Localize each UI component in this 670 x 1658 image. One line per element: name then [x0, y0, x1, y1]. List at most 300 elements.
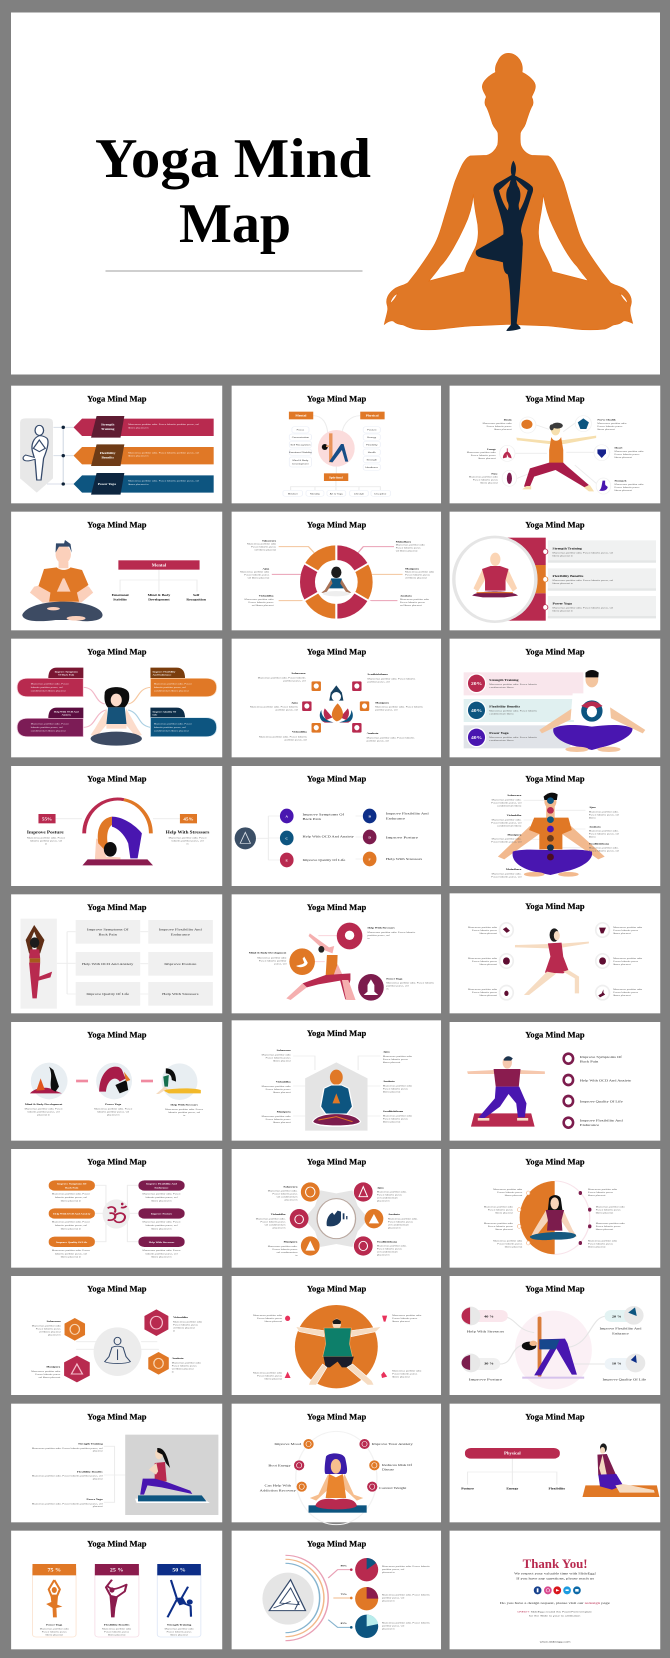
labels — [32, 1442, 104, 1508]
panel: slide 4 seated man and mental tree — [11, 512, 222, 630]
panel: slide 12 man with seven chakras — [450, 766, 660, 886]
labels right: Nerve Health — [597, 418, 616, 422]
pill: improve symptoms — [49, 1180, 95, 1202]
labels: Maecenas porttitor odio. Fusce lobortis — [386, 982, 435, 985]
labels left: Fusce lobortis purus — [266, 1057, 291, 1059]
labels: Anahata — [172, 1356, 184, 1360]
labels left: libero placerat — [478, 457, 496, 460]
boxes: Improve Posture — [164, 962, 197, 966]
center figure — [94, 1327, 141, 1376]
label: help with stressors: Help With Stressors — [166, 830, 210, 834]
text right: libero placerat — [392, 1320, 410, 1323]
labels right: Maecenas porttitor odio. — [377, 1245, 407, 1248]
labels left: Maecenas porttitor odio. — [256, 1218, 286, 1220]
labels: Maecenas porttitor odio. Fusce lobortis porttitor purus, vel — [32, 1475, 103, 1478]
circle D: D — [368, 836, 372, 839]
labels right: libero placerat — [383, 1121, 401, 1123]
labels: lobortis porttitor purus, vel — [168, 1111, 201, 1114]
pill: help with stressors: Maecenas porttitor odio. Fusce — [143, 1249, 181, 1252]
design request note: Do you have a design request, please visit our redesign page — [500, 1601, 610, 1606]
labels: placerat — [93, 1450, 103, 1453]
labels left — [491, 793, 522, 878]
text left: libero placerat — [265, 1378, 282, 1380]
text right: libero placerat — [588, 1246, 606, 1249]
labels — [25, 1102, 204, 1117]
gauge 40: Help With Stressors — [467, 1330, 505, 1333]
tree: mental: Mind & Body — [148, 593, 171, 597]
house frame — [305, 1062, 368, 1131]
labels right: Fusce lobortis purus — [388, 1221, 414, 1223]
callout: improve flexibility: And Endurance — [153, 674, 172, 677]
panel: slide 3 warrior pose organ benefits — [450, 386, 660, 503]
pill: improve quality — [49, 1237, 95, 1259]
labels left: Fusce lobortis purus — [261, 1221, 286, 1223]
dash connector 2 — [141, 1080, 153, 1082]
rows — [548, 540, 656, 618]
boxes: Endurance — [171, 932, 190, 936]
labels: Fusce lobortis purus — [173, 1324, 199, 1326]
labels: Fusce lobortis purus — [36, 1328, 62, 1330]
pill: improve posture — [138, 1208, 185, 1230]
rows: Maecenas porttitor odio. Fusce lobortis purus, vel — [553, 579, 614, 582]
thank you message: We respect your valuable time with SlideEgg! — [514, 1571, 596, 1576]
pie 2: orange — [341, 1587, 378, 1610]
labels left: Sahasrara — [292, 671, 306, 675]
om icon — [103, 1199, 130, 1229]
text left: Fusce lobortis purus — [472, 929, 498, 932]
pie text: Maecenas porttitor odio. Fusce lobortis — [382, 1622, 431, 1624]
chakra icons — [302, 681, 369, 733]
gauge 20 — [600, 1306, 644, 1335]
panel: slide 6 ring with seated figure and three rows — [450, 512, 660, 630]
card: 75 percent: libero placerat — [46, 1634, 63, 1636]
title: Yoga Mind Map — [307, 1412, 366, 1422]
ribbon: flexibility benefits: libero placerat in — [128, 455, 149, 458]
circle E — [280, 853, 294, 867]
title: Yoga Mind Map — [525, 1285, 585, 1294]
labels: Maecenas porttitor odio. Fusce — [165, 1108, 204, 1111]
text left: Maecenas porttitor odio — [253, 1372, 283, 1374]
card: 50 percent: Maecenas porttitor odio — [165, 1628, 194, 1630]
tree: mental: Recognition — [186, 598, 206, 602]
labels right: Maecenas porttitor odio. — [589, 847, 619, 850]
labels: Power Yoga — [386, 977, 403, 980]
text left: Fusce lobortis purus — [472, 991, 498, 994]
text left: Maecenas porttitor odio — [493, 1188, 523, 1191]
labels — [31, 1315, 203, 1379]
gauge 20: 20 % — [612, 1315, 622, 1318]
labels right — [383, 1050, 413, 1123]
connectors — [83, 687, 106, 727]
slides row 1 and 2 — [11, 386, 660, 630]
text left: libero placerat — [495, 1212, 513, 1214]
labels right: Fusce lobortis purus — [377, 1194, 403, 1197]
card: 50 percent: Fusce lobortis purus — [167, 1631, 192, 1633]
labels: porttitor purus, vel — [386, 985, 409, 988]
percent: 45 — [180, 814, 197, 823]
connectors — [57, 932, 148, 994]
labels left: Fusce lobortis purus, vel — [491, 802, 522, 805]
title: Yoga Mind Map — [307, 1539, 366, 1549]
text right: libero placerat — [588, 1194, 606, 1197]
labels: Flexibility Benefits — [77, 1470, 104, 1473]
text right: Maecenas porttitor odio — [596, 1222, 625, 1225]
illustration: seated orange silhouette with navy tree pose figure — [384, 53, 633, 331]
panel: slide 19 om symbol with pills — [11, 1149, 222, 1268]
labels left: Maecenas porttitor odio — [469, 476, 499, 479]
pill: help with ocd: Maecenas porttitor odio. Fusce — [52, 1221, 91, 1224]
pill: improve symptoms: lobortis porttitor purus, vel — [55, 1196, 87, 1199]
connector dots — [543, 549, 548, 610]
labels right: Fusce lobortis purus — [396, 547, 422, 550]
labels: Sahasrara — [47, 1319, 61, 1323]
labels right: placerat in — [377, 1254, 390, 1257]
rows: libero placerat in — [553, 555, 574, 557]
percent: 45: 45% — [183, 817, 194, 821]
labels left: Fusce lobortis purus — [266, 1088, 291, 1091]
labels right: vel libero placerat — [405, 577, 427, 580]
callout: improve quality of life: Life — [153, 714, 158, 717]
box: physical: Physical — [366, 414, 379, 418]
labels right: Fusce lobortis purus — [400, 601, 426, 604]
connectors — [500, 1316, 607, 1364]
title: Yoga Mind Map — [525, 902, 585, 912]
labels right: Fusce lobortis purus — [383, 1118, 409, 1120]
labels: Maecenas porttitor odio. Fusce — [25, 1108, 63, 1110]
labels left: Fusce lobortis purus — [487, 425, 512, 428]
text right — [613, 926, 643, 997]
labels left: Maecenas porttitor odio — [262, 1054, 291, 1056]
label: help with stressors: lobortis porttitor purus, vel — [172, 840, 204, 842]
text left: Maecenas porttitor odio — [253, 1314, 283, 1317]
tree: mental: Stability — [113, 598, 127, 602]
callout: improve quality of life: condimentum libero placerat — [154, 730, 189, 732]
callout: improve symptoms: lobortis porttitor purus, vel — [31, 686, 63, 689]
labels left: porttitor purus, vel — [285, 739, 307, 741]
list: mental items: Development — [292, 463, 309, 465]
heading: Yoga Mind Map: Map — [179, 193, 291, 255]
panel: slide 25 lunge on gray square — [11, 1404, 222, 1522]
labels: in — [368, 937, 370, 940]
labels left: Fusce lobortis purus — [266, 1118, 291, 1121]
card: 50 percent: Strength Training — [167, 1623, 192, 1626]
pill: improve quality: Maecenas porttitor odio. Fusce — [52, 1249, 91, 1252]
labels left: Maecenas porttitor odio — [247, 543, 277, 546]
labels left: Nose — [491, 472, 499, 475]
labels left: Maecenas porttitor odio. — [492, 838, 522, 841]
ribbon: flexibility benefits — [74, 444, 214, 466]
text right — [392, 1314, 422, 1379]
tree: mental: Mental — [152, 563, 167, 567]
pose 1 — [30, 1063, 68, 1099]
figure: seated woman — [321, 567, 351, 596]
figure: wheel pose — [82, 817, 153, 865]
panel: slide 2 mental physical spiritual map — [232, 386, 441, 503]
pie 1: crimson: 90% — [341, 1564, 347, 1568]
figure: seated woman on mat — [309, 1453, 367, 1513]
labels: Help With Stressors — [171, 1103, 199, 1106]
connectors — [524, 800, 585, 848]
text right: Maecenas porttitor odio — [392, 1370, 422, 1373]
labels left: Fusce lobortis purus — [473, 479, 499, 482]
labels left: Vishuddha — [271, 1212, 286, 1216]
gauge 10: Improve Quality Of Life — [603, 1378, 647, 1381]
title: Yoga Mind Map — [87, 1539, 147, 1549]
title: Yoga Mind Map — [307, 394, 366, 404]
benefit labels: Control Weight — [379, 1486, 406, 1490]
labels left: Maecenas porttitor odio — [467, 451, 496, 454]
labels left: vel libero placerat — [248, 577, 270, 580]
labels: Power Yoga — [87, 1497, 103, 1501]
labels: placerat in — [107, 1114, 120, 1116]
title: Yoga Mind Map — [525, 520, 585, 530]
rows: Maecenas porttitor odio. Fusce lobortis purus, vel — [553, 552, 614, 554]
item labels: Improve Posture — [386, 835, 418, 839]
dots — [518, 1191, 591, 1245]
labels: in — [386, 988, 389, 991]
labels left: libero placerat — [273, 1060, 291, 1062]
panel: slide 24 triangle pose with percent gauges — [450, 1276, 660, 1395]
percent: 55 — [38, 814, 56, 823]
percentage circles: 40% — [471, 736, 482, 741]
labels: Fusce lobortis purus — [35, 1373, 61, 1376]
band text: Maecenas porttitor odio. Fusce lobortis — [489, 710, 538, 712]
pill: improve posture: Improve Posture — [151, 1213, 173, 1216]
panel: slide 5 chakra ring — [232, 512, 441, 630]
list: mental items — [289, 427, 313, 467]
text left: libero placerat — [480, 932, 497, 935]
card: 50 percent — [157, 1564, 201, 1637]
labels: Maecenas porttitor odio — [31, 1370, 61, 1373]
title: Yoga Mind Map — [525, 647, 585, 657]
text right: Maecenas porttitor odio — [392, 1314, 422, 1317]
figure: vitruvian stance — [296, 1319, 381, 1385]
list: mental items: Self Recognition — [290, 444, 311, 446]
panel: slide 15 woman with six small icons — [450, 893, 660, 1013]
labels left: Vishuddha — [276, 1080, 291, 1084]
labels right: Muladhara — [396, 540, 412, 543]
panel: slide 9 percentage bands with man — [450, 639, 660, 757]
gauge 40 — [462, 1307, 508, 1333]
ribbon: flexibility benefits: Maecenas porttitor odio. Fusce lobortis porttitor purus, vel — [128, 452, 199, 454]
list: mental items: Focus — [297, 429, 305, 432]
labels right: Maecenas porttitor odio — [615, 483, 644, 486]
text right: Fusce lobortis purus — [613, 991, 639, 994]
labels right: libero — [589, 817, 596, 819]
labels right: Ajna — [377, 1186, 384, 1189]
labels right: Fusce lobortis purus — [615, 453, 640, 456]
hexagon: manipura — [64, 1356, 90, 1382]
callout: help with ocd: Anxiety — [62, 714, 72, 717]
labels left: Fusce lobortis purus — [249, 601, 274, 604]
title: Yoga Mind Map — [87, 1285, 147, 1294]
pie 1: crimson — [341, 1558, 378, 1581]
figure: warrior pose — [516, 423, 596, 491]
list: physical items: Hardiness — [366, 466, 379, 469]
title: Yoga Mind Map — [87, 647, 147, 657]
labels right: Maecenas porttitor odio — [615, 450, 644, 453]
labels left: Fusce lobortis purus — [471, 454, 497, 457]
figure: seated man — [22, 540, 103, 621]
label: improve posture: Improve Posture — [27, 830, 64, 834]
icons — [290, 1182, 383, 1256]
labels: Maecenas porttitor odio. Fusce lobortis — [368, 931, 416, 934]
list: spiritual items: Art & Yoga — [330, 493, 344, 495]
labels left: Sahasrara — [277, 1048, 291, 1052]
title: Yoga Mind Map — [87, 1412, 147, 1422]
figure: warrior — [286, 933, 356, 1000]
text left: Fusce lobortis purus — [488, 1225, 514, 1228]
text left: libero placerat — [495, 1228, 513, 1231]
rows: Maecenas porttitor odio. Fusce lobortis purus, vel — [553, 607, 614, 610]
panel: slide 21 half circle with seated woman — [450, 1149, 660, 1268]
text right: libero placerat — [613, 932, 631, 935]
colored half band — [454, 537, 546, 622]
pie text: porttitor purus, vel — [382, 1625, 405, 1627]
labels left: Maecenas porttitor odio — [245, 598, 274, 601]
boxes: Help With Stressors — [162, 992, 199, 996]
panel: slide 20 gear with six chakras — [232, 1149, 441, 1268]
labels: placerat — [93, 1478, 103, 1480]
callout: help with ocd: Help With OCD And — [54, 711, 79, 713]
title: Yoga Mind Map — [87, 394, 147, 404]
labels: Maecenas porttitor odio. Fusce — [94, 1108, 133, 1110]
labels right: vel condimentum — [377, 1197, 398, 1200]
text left: Fusce lobortis purus — [257, 1317, 283, 1320]
backdrop — [515, 1311, 592, 1389]
pill: improve flexibility — [138, 1180, 185, 1202]
item labels — [303, 811, 429, 862]
circle B — [363, 809, 376, 823]
ribbon: strength training: Training — [101, 427, 115, 431]
labels left: Vishuddha — [259, 594, 274, 598]
box: spiritual — [324, 473, 348, 481]
labels right: Maecenas porttitor odio — [383, 1055, 413, 1058]
list: mental items: Concentration — [292, 436, 310, 439]
labels: Strength Training — [78, 1442, 103, 1446]
labels right: porttitor purus, vel — [375, 709, 398, 712]
labels: Mind & Body Development — [249, 951, 286, 955]
label: improve posture — [27, 830, 66, 845]
labels: in — [172, 1371, 175, 1373]
benefit icons — [562, 1052, 574, 1129]
figure: seated — [472, 553, 518, 597]
box: spiritual: Spiritual — [329, 476, 343, 479]
panel: slide 29 arcs and three pie charts — [232, 1531, 441, 1649]
callout: improve quality of life: Improve Quality Of — [153, 711, 176, 713]
text right: libero placerat — [596, 1228, 613, 1231]
label: help with stressors: Maecenas porttitor odio. Fusce — [169, 837, 207, 839]
list: physical items: Health — [368, 451, 376, 454]
text left: Fusce lobortis purus — [488, 1209, 514, 1211]
labels left: porttitor purus, vel — [276, 709, 298, 712]
tree: physical — [461, 1448, 565, 1490]
title: Yoga Mind Map — [525, 1412, 585, 1422]
gauge 40: 40 % — [484, 1315, 494, 1318]
labels left: Vishuddha — [292, 730, 307, 734]
central triangle pose — [262, 1573, 314, 1625]
card: 25 percent: Flexibility Benefits — [104, 1623, 130, 1626]
pose 2 — [96, 1063, 132, 1099]
connectors — [293, 1056, 380, 1116]
pill: improve posture: libero placerat in — [151, 1228, 172, 1230]
pill: help with stressors — [138, 1237, 185, 1259]
list: physical items: Posture — [367, 429, 377, 432]
labels — [249, 926, 435, 991]
boxes: Improve Quality Of Life — [86, 992, 129, 996]
text right: Fusce lobortis purus — [596, 1209, 622, 1211]
labels: Fusce lobortis porttitor — [259, 960, 287, 962]
labels right: Fusce lobortis purus — [383, 1088, 409, 1090]
panel: slide 30 thank you — [450, 1531, 660, 1649]
text right: libero placerat — [392, 1376, 410, 1379]
text left: libero placerat — [505, 1246, 523, 1249]
rows: libero placerat in — [553, 610, 574, 613]
concentric arcs — [285, 1555, 328, 1641]
tree: mental — [112, 560, 206, 602]
text right: Maecenas porttitor odio — [596, 1206, 625, 1208]
labels right — [367, 672, 424, 742]
ring of six segments — [300, 543, 373, 621]
ribbon: power yoga — [74, 473, 214, 495]
labels left: libero placerat — [273, 1091, 291, 1094]
labels left: Maecenas porttitor odio. Fusce lobortis — [259, 736, 308, 738]
pie text: placerat in — [382, 1571, 396, 1574]
labels right: Maecenas porttitor odio. — [589, 811, 619, 813]
labels left: libero placerat — [494, 428, 512, 431]
labels: Power Yoga — [105, 1102, 122, 1106]
rows: Strength Training — [553, 547, 582, 550]
label: improve posture: Maecenas porttitor odio. Fusce — [27, 837, 66, 839]
callout: help with ocd: condimentum libero placerat — [31, 730, 66, 732]
text right: Fusce lobortis purus — [613, 960, 639, 963]
label: help with stressors — [166, 830, 210, 845]
labels right — [597, 418, 644, 492]
labels left: Lungs — [487, 447, 497, 451]
labels left: Maecenas porttitor odio — [483, 422, 512, 425]
figure: seated man — [539, 670, 645, 752]
ribbon: flexibility benefits: Benefits — [101, 456, 115, 459]
labels right: Fusce lobortis purus — [597, 425, 623, 428]
callout: improve quality of life: Maecenas porttitor odio. Fusce — [154, 723, 193, 726]
pill: help with stressors: Help With Stressors — [149, 1241, 174, 1244]
item labels: Help With OCD And Anxiety — [303, 834, 354, 839]
title: Yoga Mind Map — [525, 394, 585, 404]
card: 25 percent: 25 % — [110, 1568, 123, 1573]
label: improve posture: lobortis porttitor purus, vel — [30, 840, 63, 842]
gauge 10 — [603, 1354, 647, 1381]
labels right — [589, 805, 619, 853]
labels left: Fusce lobortis purus, vel — [491, 841, 522, 844]
social icons — [534, 1586, 581, 1594]
connector timeline — [47, 426, 74, 486]
gauge 30: 30 % — [484, 1362, 494, 1366]
hexagon: vishuddha — [144, 1309, 168, 1336]
card: 75 percent: Maecenas porttitor odio — [40, 1628, 69, 1630]
panel: slide 11 lettered circle tree — [232, 766, 441, 886]
credit note — [517, 1611, 593, 1618]
labels right: Anahata — [367, 731, 379, 735]
figure: cobra pose on mat — [582, 1443, 659, 1497]
percent: 55: 55% — [42, 817, 53, 821]
text right: Fusce lobortis purus — [392, 1373, 418, 1376]
labels: Help With Stressors — [368, 926, 396, 929]
text left: Maecenas porttitor odio — [493, 1240, 523, 1243]
text left: Fusce lobortis purus — [497, 1191, 523, 1194]
title: Yoga Mind Map — [307, 1158, 366, 1167]
text left: libero placerat — [265, 1320, 282, 1323]
callout: improve symptoms: Improve Symptoms — [55, 671, 78, 673]
